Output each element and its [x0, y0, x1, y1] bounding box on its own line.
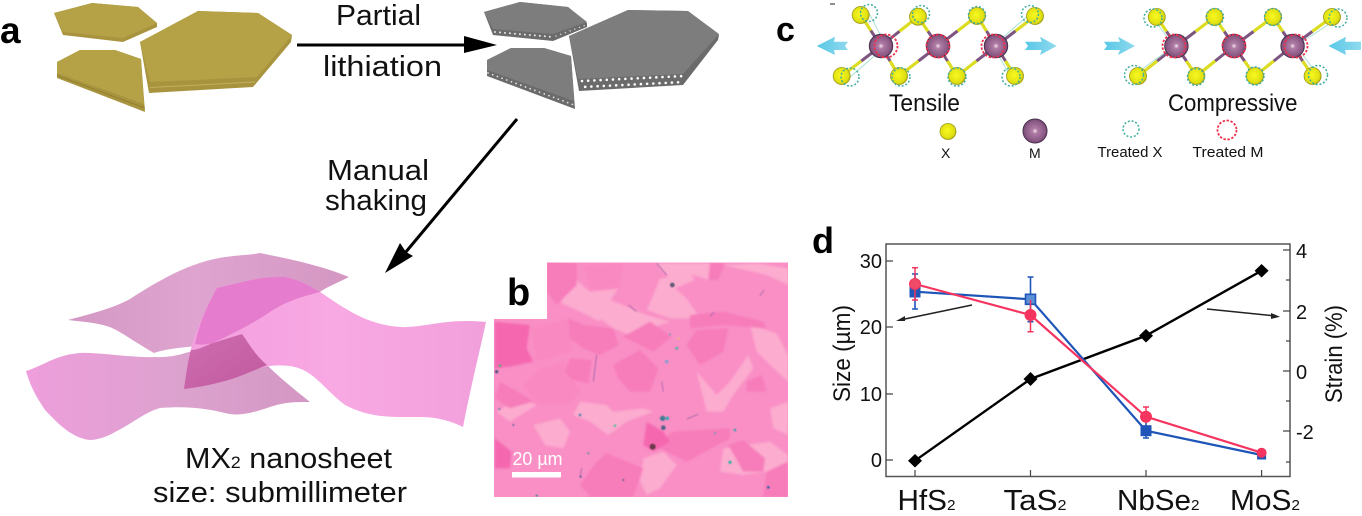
scale bar: 20 µm [512, 449, 562, 469]
compressive lattice [1124, 8, 1347, 86]
left axis tick labels: 0 [871, 450, 882, 472]
arrow: tensile left [817, 37, 848, 55]
arrow: manual shaking [385, 119, 517, 273]
right axis tick labels: 2 [1296, 302, 1307, 324]
arrow: compressive right [1328, 37, 1361, 55]
legend: Treated M [1192, 144, 1264, 161]
label: partial lithiation: lithiation [323, 51, 442, 83]
strain series (black diamonds) [908, 264, 1269, 468]
plot frame and ticks [886, 244, 1290, 476]
caption: MX2 nanosheet size: MX2 nanosheet [185, 443, 392, 475]
label: tensile: Tensile [889, 90, 960, 117]
left axis tick labels: 10 [860, 384, 882, 406]
micrograph image [494, 262, 788, 497]
legend: Treated X [1098, 144, 1162, 161]
panel a: exfoliation scheme [0, 0, 719, 509]
scale bar [512, 449, 562, 478]
arrow: compressive left [1104, 37, 1135, 55]
left axis tick labels: 30 [860, 251, 882, 273]
right axis tick labels: 0 [1296, 362, 1307, 384]
right axis title: Strain (%) [1321, 305, 1348, 403]
tensile lattice [833, 4, 1044, 86]
panel label c: c [776, 11, 795, 49]
specks on micrograph [495, 263, 770, 497]
panel label b: b [507, 272, 530, 314]
panel label a: a [0, 10, 21, 51]
legend: X [941, 145, 951, 161]
x axis labels [898, 485, 1300, 516]
size series (blue squares) [910, 274, 1266, 459]
left axis tick labels [860, 251, 882, 472]
right axis tick labels [1296, 241, 1314, 444]
label: manual shaking: shaking [325, 185, 427, 217]
arrow: points to size axis [896, 305, 972, 321]
label: compressive: Compressive [1168, 90, 1298, 117]
size series (red circles) [910, 268, 1266, 457]
right axis tick labels: -2 [1296, 422, 1314, 444]
label: manual shaking [325, 155, 429, 217]
label: manual shaking: Manual [327, 155, 429, 187]
caption: MX2 nanosheet size: size: submillimeter [153, 477, 407, 509]
panel b: optical micrograph [494, 262, 788, 497]
arrow: tensile right [1025, 37, 1057, 55]
label: partial lithiation [323, 0, 442, 83]
caption: MX2 nanosheet size [153, 443, 407, 509]
panel c: strain schematic [776, 4, 1361, 161]
legend [940, 119, 1264, 161]
arrow: partial lithiation [297, 36, 497, 53]
panel d: size and strain chart [812, 220, 1348, 516]
panel label d: d [812, 220, 834, 261]
right axis tick labels: 4 [1296, 241, 1307, 263]
label: partial lithiation: Partial [336, 0, 421, 32]
legend: M [1029, 145, 1041, 161]
grey lithiated flakes with intercalation holes [484, 2, 719, 109]
left axis tick labels: 20 [860, 317, 882, 339]
gold bulk MX2 flakes [54, 3, 292, 112]
pink MX2 nanosheets [26, 253, 486, 440]
arrow: points to strain axis [1207, 309, 1280, 319]
left axis title: Size (µm) [829, 305, 856, 402]
